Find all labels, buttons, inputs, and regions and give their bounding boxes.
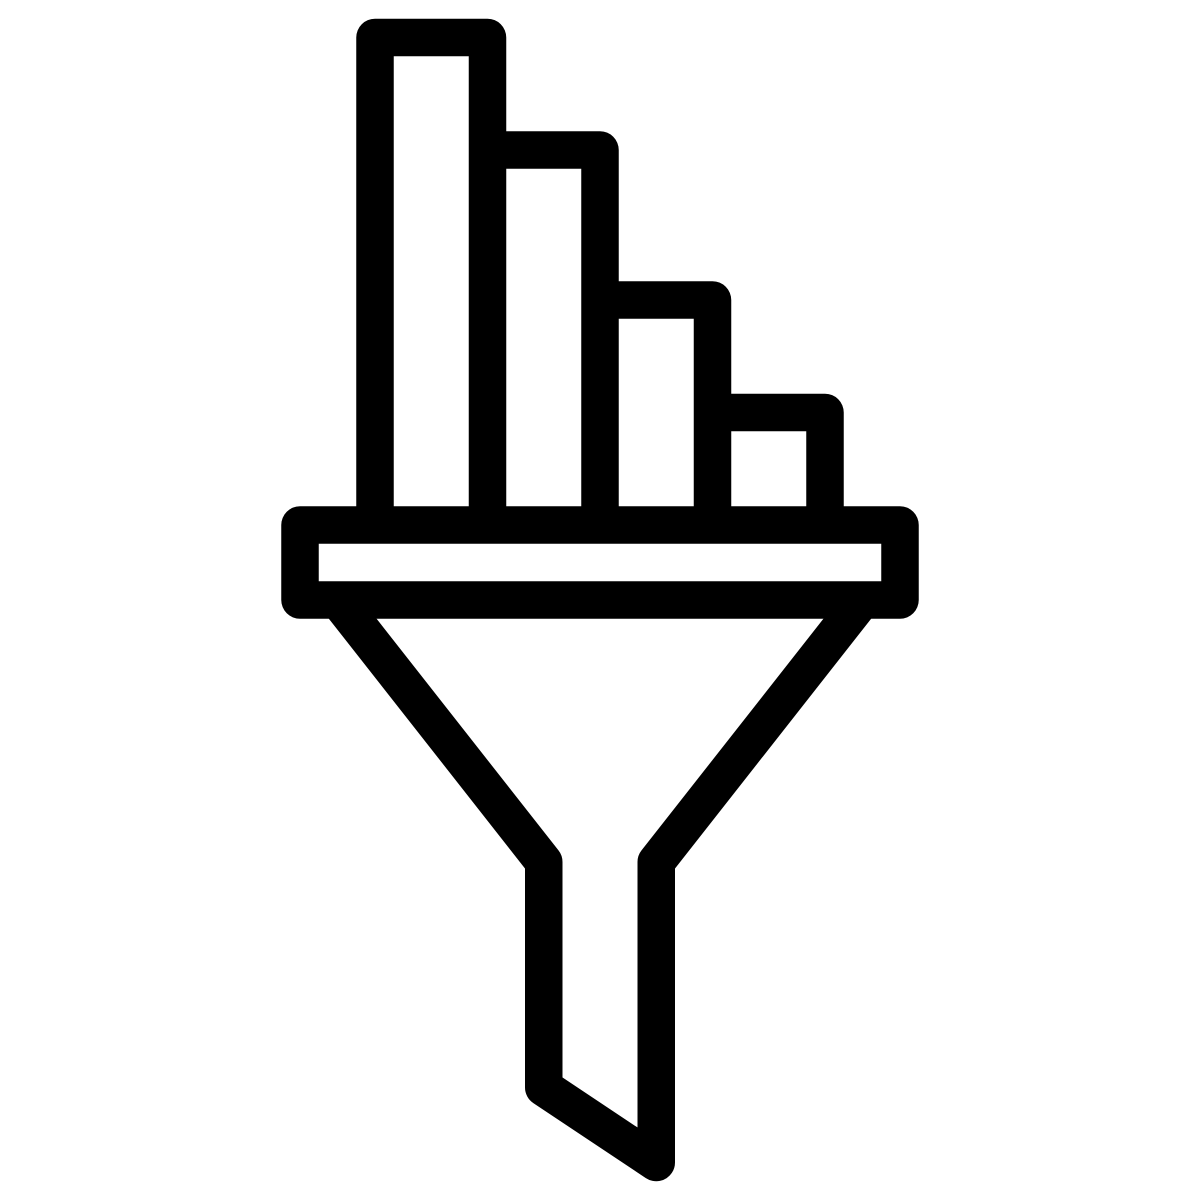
funnel rim [300, 525, 900, 600]
bar 4 [712, 412, 825, 525]
bar 3 [600, 300, 712, 525]
bar 2 [488, 150, 600, 525]
funnel body and spout [338, 600, 862, 1162]
bar 1 [375, 38, 488, 525]
bar chart: four descending bars [375, 38, 825, 525]
